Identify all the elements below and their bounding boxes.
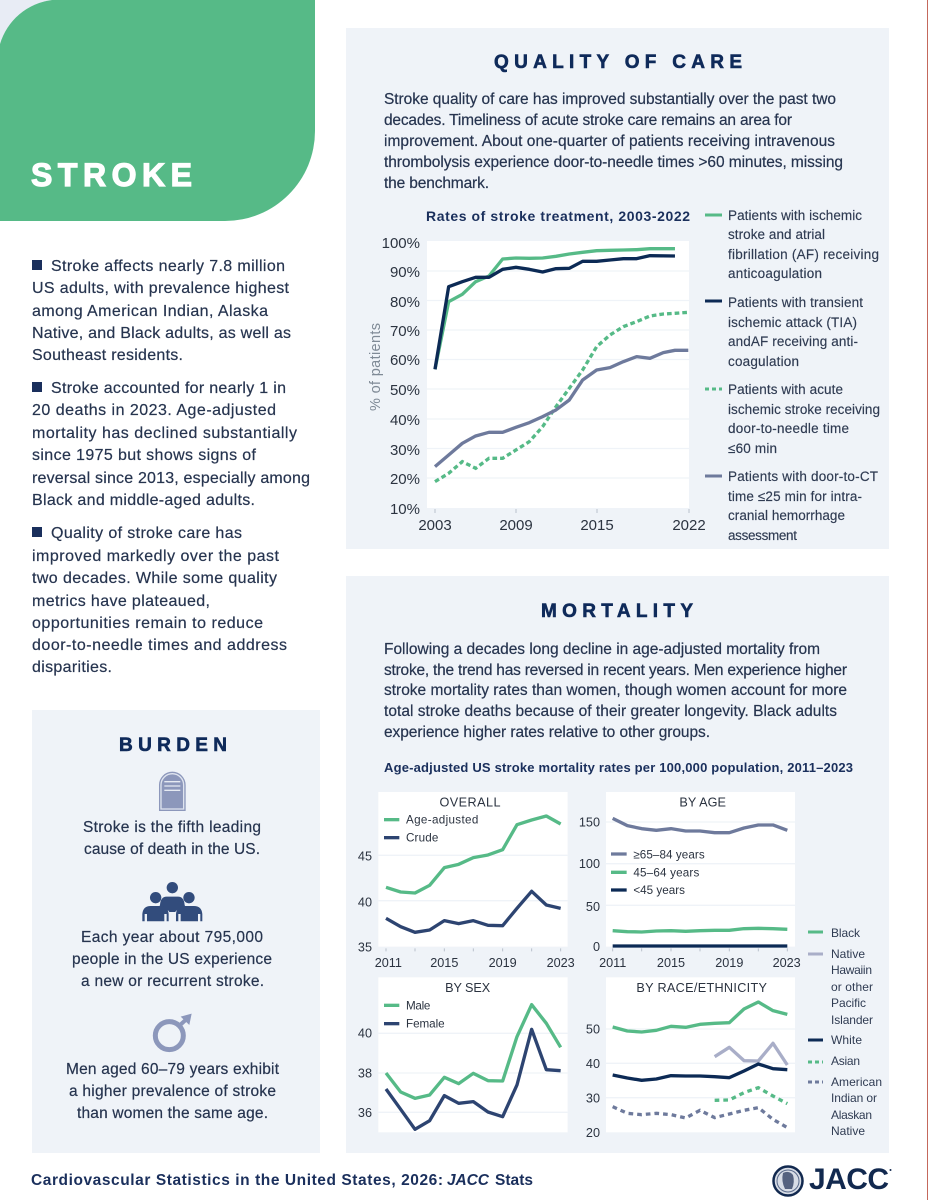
legend: race and ethnicity: Pacific [831, 996, 866, 1010]
line chart: by age: 2015 [657, 956, 685, 970]
text block: quality intro [384, 91, 843, 192]
line chart: rates of stroke treatment: 2022 [672, 517, 706, 534]
legend: treatment rates: assessment [728, 528, 797, 543]
panel: mortality [346, 576, 889, 1153]
legend: race and ethnicity [808, 926, 882, 1138]
text block: key points: Quality of stroke care has [51, 525, 242, 542]
line chart: by sex: 38 [358, 1066, 372, 1080]
line chart: overall: OVERALL [439, 796, 500, 810]
text block: key points: 20 deaths in 2023. Age-adjusted [32, 402, 276, 419]
text block: quality intro: decades. Timeliness of acute stroke care remains an area for [384, 112, 792, 129]
line chart: by age: 2019 [715, 956, 743, 970]
text block: key points [32, 258, 310, 676]
legend: treatment rates: door-to-needle time [728, 421, 849, 436]
line chart: rates of stroke treatment: 2003 [418, 517, 452, 534]
line chart: by sex: Male [406, 1000, 430, 1013]
text block: key points: metrics have plateaued, [32, 593, 210, 610]
text: leading cause: cause of death in the US. [84, 841, 260, 858]
logo: JACC [774, 1163, 892, 1196]
legend: treatment rates: anticoagulation [728, 266, 822, 281]
legend: treatment rates: fibrillation (AF) receiving [728, 247, 879, 262]
line chart: by age: 2011 [599, 956, 626, 970]
text block: key points: Native, and Black adults, as well as [32, 325, 291, 342]
line chart: rates of stroke treatment: 10% [390, 501, 420, 518]
text: annual strokes: a new or recurrent stroke. [81, 973, 264, 990]
icon: people group [142, 882, 202, 921]
line chart: by sex: Female [406, 1018, 445, 1031]
line chart: rates of stroke treatment: 90% [390, 264, 420, 281]
line chart: overall: 2015 [430, 956, 458, 970]
legend: treatment rates: ischemic attack (TIA) [728, 315, 857, 330]
icon: gravestone [159, 772, 186, 811]
line chart: rates of stroke treatment: 2015 [580, 517, 614, 534]
line chart: by age: 100 [579, 857, 600, 871]
chart title: rates of stroke treatment: Rates of stroke treatment, 2003-2022 [426, 208, 690, 224]
line chart: rates of stroke treatment: 100% [382, 235, 420, 252]
text: annual strokes: Each year about 795,000 [81, 929, 263, 946]
legend: treatment rates: Patients with acute [728, 382, 843, 397]
line chart: by age: 0 [593, 940, 600, 954]
line chart: overall: 40 [358, 895, 372, 909]
text block: mortality intro: Following a decades long decline in age-adjusted mortality from [384, 641, 820, 658]
line chart: by race and ethnicity: 30 [586, 1092, 600, 1106]
line chart: overall [358, 792, 575, 970]
text block: quality intro: thrombolysis experience door-to-needle times >60 minutes, missing [384, 154, 843, 171]
text block: key points: door-to-needle times and address [32, 637, 287, 654]
line chart: overall: Age-adjusted [406, 814, 478, 827]
legend: treatment rates: Patients with transient [728, 295, 863, 310]
text: men prevalence: Men aged 60–79 years exhibit [66, 1061, 280, 1078]
legend: race and ethnicity: White [831, 1033, 862, 1047]
legend: race and ethnicity: Native [831, 947, 865, 961]
line chart: by race and ethnicity: 40 [586, 1057, 600, 1071]
text block: key points: reversal since 2013, especially among [32, 470, 310, 487]
line chart: by age: 50 [586, 900, 600, 914]
text: leading cause [83, 819, 261, 858]
legend: treatment rates: time ≤25 min for intra- [728, 489, 862, 504]
text: men prevalence [66, 1061, 280, 1122]
line chart: rates of stroke treatment: 30% [390, 442, 420, 459]
line chart: by age: 45–64 years [633, 866, 699, 879]
legend: treatment rates: ≤60 min [728, 441, 777, 456]
legend: treatment rates: andAF receiving anti- [728, 334, 858, 349]
text block: mortality intro: stroke mortality rates than women, though women account for more [384, 682, 847, 699]
line chart: by race and ethnicity: 50 [586, 1022, 600, 1036]
line chart: by race and ethnicity: BY RACE/ETHNICITY [636, 981, 768, 995]
text block: key points: since 1975 but shows signs of [32, 447, 257, 464]
text block: key points: improved markedly over the past [32, 548, 280, 565]
line chart: overall: Crude [406, 832, 438, 845]
header banner: stroke [0, 0, 315, 221]
legend: race and ethnicity: Asian [831, 1054, 860, 1068]
legend: race and ethnicity: Hawaiin [831, 963, 872, 977]
header banner: stroke: STROKE [31, 157, 192, 193]
line chart: rates of stroke treatment: 2009 [499, 517, 533, 534]
heading: quality of care: QUALITY OF CARE [494, 52, 742, 73]
text block: quality intro: the benchmark. [384, 175, 489, 192]
line chart: by race and ethnicity [586, 977, 795, 1140]
line chart: by sex: 40 [358, 1027, 372, 1041]
footer citation: Stats [495, 1172, 533, 1189]
line chart: rates of stroke treatment: 50% [390, 382, 420, 399]
legend: race and ethnicity: Indian or [831, 1091, 877, 1105]
line chart: rates of stroke treatment: 80% [390, 294, 420, 311]
line chart: by age [579, 792, 801, 970]
footer citation: JACC [447, 1172, 490, 1189]
legend: treatment rates: Patients with door-to-CT [728, 469, 878, 484]
chart title: mortality rates: Age-adjusted US stroke mortality rates per 100,000 population, 2011–2023 [384, 760, 853, 775]
legend: treatment rates: coagulation [728, 354, 799, 369]
line chart: by age: 150 [579, 816, 600, 830]
text: annual strokes [72, 929, 272, 990]
legend: race and ethnicity: Black [831, 926, 861, 940]
text block: quality intro: Stroke quality of care has improved substantially over the past two [384, 91, 836, 108]
legend: treatment rates: ischemic stroke receiving [728, 402, 880, 417]
text block: key points: Stroke affects nearly 7.8 million [51, 258, 285, 275]
legend: race and ethnicity: American [831, 1075, 882, 1089]
line chart: by age: BY AGE [679, 796, 726, 810]
text: annual strokes: people in the US experience [72, 951, 272, 968]
legend: treatment rates: stroke and atrial [728, 227, 825, 242]
line chart: by race and ethnicity: 20 [586, 1126, 600, 1140]
text block: key points: mortality has declined substantially [32, 425, 297, 442]
text block: quality intro: improvement. About one-quarter of patients receiving intravenous [384, 133, 835, 150]
line chart: by age: ≥65–84 years [633, 848, 705, 861]
text: men prevalence: than women the same age. [77, 1105, 268, 1122]
panel: burden [32, 710, 320, 1153]
line chart: rates of stroke treatment: % of patients [368, 323, 384, 411]
text block: mortality intro: experience higher rates relative to other groups. [384, 724, 710, 741]
line chart: rates of stroke treatment: 40% [390, 412, 420, 429]
footer citation: Cardiovascular Statistics in the United States, 2026: [31, 1172, 443, 1189]
line chart: by sex [358, 977, 568, 1132]
text block: key points: among American Indian, Alaska [32, 303, 268, 320]
text block: mortality intro [384, 641, 847, 741]
heading: mortality: MORTALITY [541, 601, 693, 622]
logo: JACC: JACC [809, 1163, 889, 1196]
line chart: by sex: BY SEX [445, 981, 491, 995]
line chart: by age: <45 years [633, 884, 685, 897]
line chart: rates of stroke treatment: 70% [390, 323, 420, 340]
text: men prevalence: a higher prevalence of stroke [69, 1083, 276, 1100]
line chart: overall: 2019 [489, 956, 517, 970]
text block: key points: Black and middle-aged adults. [32, 492, 255, 509]
text block: key points: Southeast residents. [32, 347, 183, 364]
legend: race and ethnicity: or other [831, 980, 873, 994]
legend: treatment rates [705, 208, 880, 543]
text block: key points: disparities. [32, 659, 112, 676]
legend: race and ethnicity: Islander [831, 1013, 873, 1027]
legend: race and ethnicity: Native [831, 1124, 865, 1138]
line chart: overall: 2023 [547, 956, 575, 970]
line chart: by sex: 36 [358, 1106, 372, 1120]
text: leading cause: Stroke is the fifth leading [83, 819, 261, 836]
line chart: by age: 2023 [773, 956, 801, 970]
legend: race and ethnicity: Alaskan [831, 1108, 872, 1122]
text block: key points: two decades. While some quality [32, 570, 277, 587]
text block: key points: Stroke accounted for nearly 1 in [51, 380, 286, 397]
legend: treatment rates: Patients with ischemic [728, 208, 862, 223]
line chart: rates of stroke treatment: 60% [390, 352, 420, 369]
legend: treatment rates: cranial hemorrhage [728, 508, 845, 523]
text block: mortality intro: total stroke deaths because of their greater longevity. Black adults [384, 703, 837, 720]
line chart: overall: 35 [358, 940, 372, 954]
line chart: rates of stroke treatment: 20% [390, 471, 420, 488]
heading: burden: BURDEN [119, 735, 227, 756]
text block: mortality intro: stroke, the trend has reversed in recent years. Men experience higher [384, 662, 847, 679]
panel: quality of care [346, 28, 889, 549]
text block: key points: US adults, with prevalence highest [32, 280, 290, 297]
line chart: rates of stroke treatment [368, 235, 706, 534]
text block: key points: opportunities remain to reduce [32, 615, 263, 632]
line chart: overall: 45 [358, 849, 372, 863]
icon: male symbol [155, 1014, 192, 1050]
line chart: overall: 2011 [375, 956, 402, 970]
